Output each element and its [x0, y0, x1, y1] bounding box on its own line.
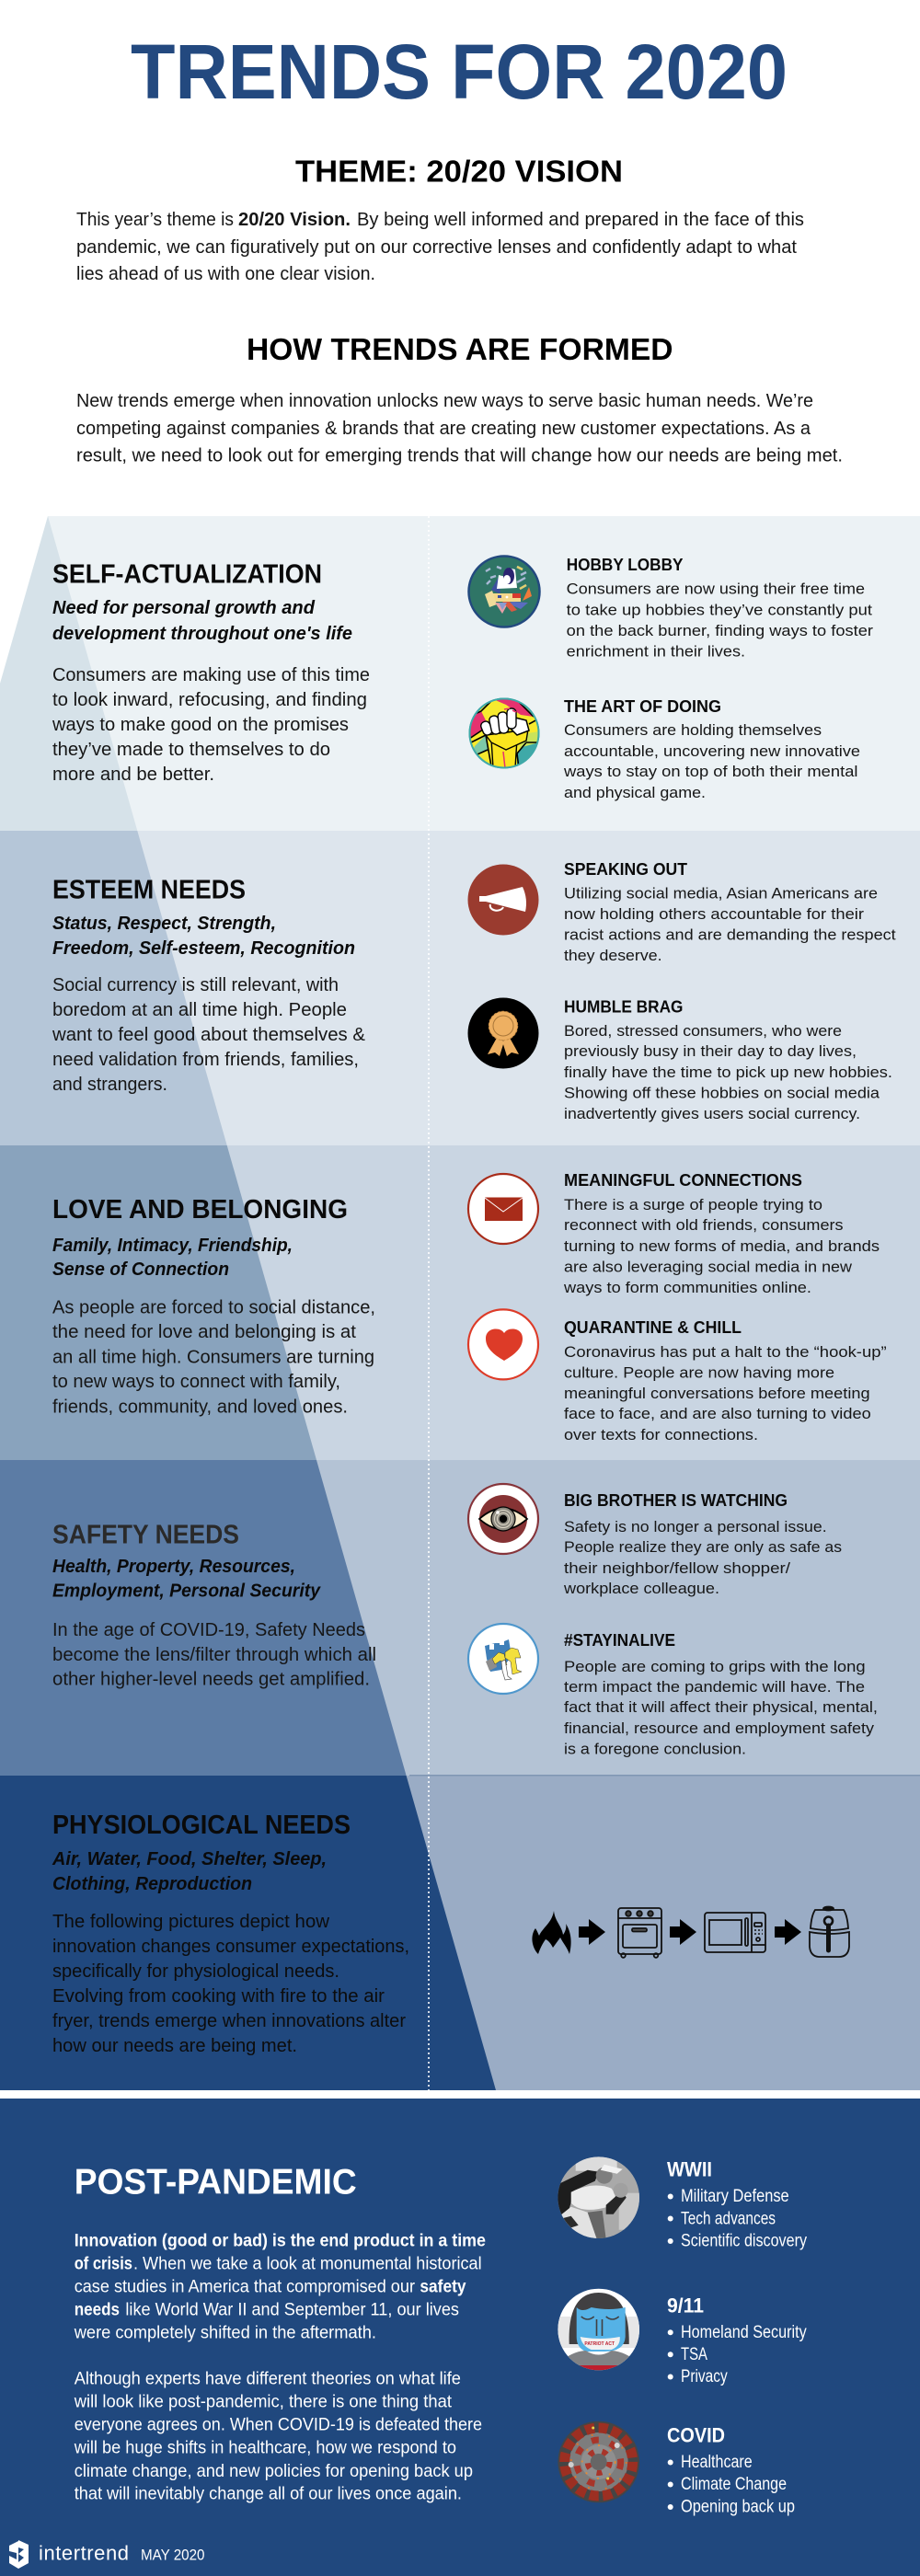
- text block: innovation in crisis: like World War II and September 11, our lives: [125, 2300, 459, 2320]
- item text: term impact the pandemic will have. The: [564, 1678, 865, 1696]
- text block: love and belonging: to new ways to connect with family,: [52, 1372, 340, 1392]
- icon: flame: [532, 1911, 571, 1954]
- text block: life post-pandemic: that will inevitably change all of our lives once again.: [75, 2484, 462, 2504]
- item text: [564, 1022, 892, 1122]
- text block: innovation in crisis: were completely shifted in the aftermath.: [74, 2323, 376, 2343]
- text block: innovation in crisis: . When we take a look at monumental historical: [133, 2254, 482, 2274]
- text block: how trends are formed: competing against companies & brands that are creating new customer expectations. As a: [76, 418, 811, 439]
- item: stayinalive: [468, 1624, 878, 1757]
- subheading: self-actualization: Need for personal growth and: [52, 598, 316, 618]
- text block: innovation in crisis: of crisis: [75, 2254, 132, 2274]
- heading: love and belonging: LOVE AND BELONGING: [52, 1195, 348, 1225]
- item text: ways to form communities online.: [563, 1279, 811, 1296]
- text block: love and belonging: friends, community, and loved ones.: [52, 1397, 348, 1417]
- text block: physiological needs: Evolving from cooking with fire to the air: [52, 1986, 385, 2007]
- heading: physiological needs: PHYSIOLOGICAL NEEDS: [52, 1811, 351, 1840]
- text block: love and belonging: As people are forced to social distance,: [52, 1297, 375, 1317]
- text block: physiological needs: [52, 1912, 409, 2056]
- text block: physiological needs: fryer, trends emerge when innovations alter: [52, 2011, 406, 2031]
- item text: previously busy in their day to day lives,: [564, 1042, 857, 1060]
- bullet list: Climate Change: [681, 2475, 787, 2494]
- text block: life post-pandemic: will look like post-pandemic, there is one thing that: [74, 2392, 453, 2412]
- icon: figures in hazmat suits on plane seats: [468, 1624, 538, 1694]
- divider: dotted vertical line: [428, 516, 430, 2090]
- item text: now holding others accountable for their: [564, 905, 864, 923]
- item text: financial, resource and employment safety: [564, 1719, 875, 1737]
- panel: love and belonging: [0, 1145, 920, 1460]
- item title: THE ART OF DOING: [564, 697, 721, 716]
- illustration: masked face with patriot act: PATRIOT ACT: [584, 2341, 615, 2347]
- icon: microwave: [705, 1913, 765, 1952]
- text block: self-actualization: Consumers are making use of this time: [52, 665, 370, 685]
- arrow 2: [670, 1919, 696, 1945]
- text block: theme description: [76, 209, 804, 284]
- item text: Coronavirus has put a halt to the “hook-up”: [564, 1343, 887, 1361]
- text block: life post-pandemic: will be huge shifts in healthcare, how we respond to: [74, 2438, 456, 2458]
- icon: raised fist: [469, 697, 539, 769]
- item text: meaningful conversations before meeting: [564, 1385, 870, 1402]
- item: hobby lobby: [469, 556, 873, 661]
- text block: innovation in crisis: [74, 2230, 486, 2343]
- subheading: esteem needs: Freedom, Self-esteem, Recognition: [52, 938, 355, 959]
- item text: Consumers are holding themselves: [564, 721, 822, 739]
- item text: Bored, stressed consumers, who were: [564, 1022, 842, 1040]
- item title: #STAYINALIVE: [564, 1631, 675, 1650]
- item text: [563, 1196, 880, 1296]
- case study: wwii: [558, 2156, 807, 2251]
- footer date: MAY 2020: [141, 2547, 204, 2564]
- item text: inadvertently gives users social currency.: [564, 1105, 860, 1122]
- item text: [563, 1518, 842, 1597]
- item text: is a foregone conclusion.: [564, 1741, 746, 1757]
- icon row: fire to oven to microwave to air fryer: [532, 1906, 849, 1958]
- item text: Consumers are now using their free time: [567, 581, 865, 598]
- item title: BIG BROTHER IS WATCHING: [564, 1491, 788, 1510]
- heading: post-pandemic: POST-PANDEMIC: [75, 2163, 357, 2202]
- subheading: safety needs: Employment, Personal Security: [52, 1581, 321, 1601]
- item text: reconnect with old friends, consumers: [564, 1216, 844, 1234]
- text block: esteem needs: Social currency is still relevant, with: [52, 975, 339, 995]
- text block: safety needs: become the lens/filter through which all: [52, 1645, 376, 1665]
- arrow 3: [775, 1919, 801, 1945]
- item text: and physical game.: [564, 784, 706, 801]
- item title: QUARANTINE & CHILL: [564, 1318, 742, 1337]
- logo: intertrend: intertrend: [39, 2542, 129, 2565]
- illustration: coronavirus: [558, 2421, 639, 2502]
- item text: There is a surge of people trying to: [564, 1196, 822, 1213]
- subheading: self-actualization: [52, 598, 352, 644]
- bullet list: Tech advances: [681, 2209, 776, 2228]
- icon: award rosette: [467, 997, 539, 1069]
- item text: over texts for connections.: [564, 1426, 758, 1443]
- text block: how trends are formed: [76, 390, 843, 466]
- text block: esteem needs: need validation from friends, families,: [52, 1050, 359, 1070]
- item text: turning to new forms of media, and brands: [564, 1237, 880, 1255]
- item text: culture. People are now having more: [564, 1364, 834, 1382]
- text block: safety needs: [52, 1620, 376, 1689]
- item text: [564, 885, 896, 964]
- item text: to take up hobbies they’ve constantly put: [567, 602, 872, 618]
- text block: theme description: lies ahead of us with one clear vision.: [76, 263, 375, 284]
- bullet list: [668, 2187, 807, 2251]
- text block: physiological needs: The following pictures depict how: [52, 1912, 330, 1932]
- text block: physiological needs: how our needs are being met.: [52, 2036, 297, 2056]
- item text: fact that it will affect their physical, mental,: [564, 1698, 878, 1716]
- item text: [563, 721, 860, 801]
- icon: eye: [468, 1484, 538, 1554]
- text block: physiological needs: specifically for physiological needs.: [52, 1961, 339, 1982]
- item text: ways to stay on top of both their mental: [563, 763, 857, 780]
- heading: self-actualization: SELF-ACTUALIZATION: [52, 560, 322, 590]
- text block: theme description: pandemic, we can figuratively put on our corrective lenses and confidently adapt to what: [76, 236, 797, 258]
- item: speaking out: [467, 860, 896, 964]
- arrow 1: [579, 1919, 605, 1945]
- text block: innovation in crisis: case studies in America that compromised our: [75, 2276, 415, 2296]
- illustration: masked face with patriot act: [558, 2288, 640, 2371]
- text block: life post-pandemic: climate change, and new policies for opening back up: [75, 2461, 473, 2481]
- text block: theme description: By being well informed and prepared in the face of this: [357, 209, 804, 230]
- item title: MEANINGFUL CONNECTIONS: [564, 1171, 802, 1190]
- item: quarantine and chill: [468, 1309, 887, 1443]
- subheading: physiological needs: Air, Water, Food, Shelter, Sleep,: [52, 1849, 327, 1869]
- subheading: physiological needs: Clothing, Reproduction: [52, 1874, 252, 1894]
- text block: love and belonging: [52, 1297, 375, 1417]
- subheading: physiological needs: [52, 1849, 327, 1894]
- panel: physiological needs: [0, 1775, 920, 2090]
- text block: self-actualization: more and be better.: [52, 765, 214, 785]
- photo: wartime kiss: [558, 2156, 640, 2239]
- icon: megaphone: [467, 865, 539, 935]
- text block: theme description: 20/20 Vision.: [238, 209, 351, 230]
- item text: Safety is no longer a personal issue.: [564, 1518, 827, 1535]
- text block: life post-pandemic: [74, 2369, 482, 2504]
- case study: covid: [558, 2421, 795, 2517]
- heading: how trends are formed: HOW TRENDS ARE FORMED: [247, 332, 673, 366]
- item text: Showing off these hobbies on social media: [564, 1084, 880, 1102]
- item text: face to face, and are also turning to video: [564, 1405, 871, 1422]
- text block: self-actualization: to look inward, refocusing, and finding: [52, 690, 367, 710]
- text block: how trends are formed: New trends emerge when innovation unlocks new ways to serve basic human needs. We’re: [76, 390, 813, 411]
- item text: People realize they are only as safe as: [564, 1538, 842, 1556]
- text block: innovation in crisis: safety: [420, 2276, 466, 2296]
- subheading: safety needs: Health, Property, Resources,: [52, 1557, 295, 1577]
- item text: accountable, uncovering new innovative: [564, 742, 860, 760]
- item text: racist actions and are demanding the respect: [564, 926, 896, 944]
- heading: esteem needs: ESTEEM NEEDS: [52, 876, 246, 905]
- subheading: safety needs: [52, 1557, 321, 1601]
- item text: [567, 581, 873, 661]
- item: the art of doing: [469, 697, 860, 801]
- subheading: love and belonging: Family, Intimacy, Friendship,: [52, 1236, 293, 1256]
- item: humble brag: [467, 997, 892, 1122]
- item title: SPEAKING OUT: [564, 860, 687, 879]
- icon: heart: [468, 1309, 538, 1379]
- bullet list: Homeland Security: [681, 2323, 807, 2342]
- item: meaningful connections: [468, 1171, 880, 1296]
- bullet list: Scientific discovery: [681, 2232, 807, 2251]
- heading: theme: THEME: 20/20 VISION: [295, 155, 623, 188]
- item text: People are coming to grips with the long: [564, 1658, 866, 1675]
- item text: enrichment in their lives.: [567, 643, 745, 661]
- case title: 9/11: [667, 2294, 704, 2317]
- item text: finally have the time to pick up new hobbies.: [564, 1064, 892, 1081]
- title: TRENDS FOR 2020: [131, 29, 788, 115]
- text block: esteem needs: want to feel good about themselves &: [52, 1025, 366, 1045]
- case study: 9/11: [558, 2288, 807, 2386]
- section: theme: [76, 155, 804, 284]
- item title: HUMBLE BRAG: [564, 998, 683, 1017]
- text block: physiological needs: innovation changes consumer expectations,: [52, 1937, 409, 1957]
- bullet list: TSA: [681, 2345, 707, 2364]
- subheading: love and belonging: Sense of Connection: [52, 1259, 229, 1280]
- icon: oven: [618, 1908, 661, 1958]
- bullet list: Privacy: [681, 2367, 728, 2386]
- item: big brother is watching: [468, 1484, 842, 1597]
- text block: safety needs: In the age of COVID-19, Safety Needs: [52, 1620, 365, 1640]
- item text: [564, 1343, 887, 1443]
- panel: post-pandemic: [0, 2099, 920, 2576]
- text block: innovation in crisis: Innovation (good or bad) is the end product in a time: [75, 2230, 486, 2250]
- text block: self-actualization: they’ve made to themselves to do: [52, 740, 330, 760]
- logo: intertrend: [9, 2540, 129, 2569]
- item text: are also leveraging social media in new: [564, 1258, 853, 1275]
- subheading: self-actualization: development throughout one's life: [52, 624, 352, 644]
- item text: workplace colleague.: [563, 1580, 719, 1597]
- icon: envelope: [468, 1174, 538, 1244]
- icon: air fryer: [810, 1906, 849, 1957]
- bullet list: Military Defense: [681, 2187, 789, 2206]
- case title: WWII: [667, 2158, 712, 2181]
- text block: esteem needs: [52, 975, 366, 1095]
- bullet list: Opening back up: [681, 2498, 795, 2517]
- bullet list: [668, 2453, 795, 2517]
- subheading: esteem needs: [52, 914, 355, 959]
- panel: safety needs: [0, 1460, 920, 1776]
- item title: HOBBY LOBBY: [567, 556, 683, 574]
- bullet list: Healthcare: [681, 2453, 753, 2472]
- item text: [564, 1658, 878, 1757]
- text block: love and belonging: the need for love and belonging is at: [52, 1322, 356, 1342]
- text block: esteem needs: and strangers.: [52, 1075, 167, 1095]
- bullet list: [668, 2323, 807, 2386]
- item text: they deserve.: [564, 947, 662, 964]
- text block: life post-pandemic: everyone agrees on. When COVID-19 is defeated there: [75, 2414, 482, 2434]
- text block: safety needs: other higher-level needs get amplified.: [52, 1669, 370, 1689]
- panel: esteem needs: [0, 831, 920, 1145]
- text block: life post-pandemic: Although experts have different theories on what life: [75, 2369, 461, 2389]
- text block: self-actualization: ways to make good on the promises: [52, 715, 349, 735]
- text block: esteem needs: boredom at an all time high. People: [52, 1000, 347, 1020]
- subheading: esteem needs: Status, Respect, Strength,: [52, 914, 276, 934]
- subheading: love and belonging: [52, 1236, 293, 1280]
- item text: Utilizing social media, Asian Americans are: [564, 885, 878, 902]
- text block: innovation in crisis: needs: [75, 2300, 120, 2320]
- text block: theme description: This year’s theme is: [76, 209, 234, 230]
- icon: person at hobby desk: [469, 556, 539, 627]
- section: how trends are formed: [76, 332, 843, 466]
- item text: their neighbor/fellow shopper/: [564, 1559, 790, 1577]
- text block: self-actualization: [52, 665, 370, 785]
- item text: on the back burner, finding ways to foster: [567, 622, 873, 639]
- text block: how trends are formed: result, we need to look out for emerging trends that will change how our needs are being met.: [76, 445, 843, 466]
- case title: COVID: [667, 2423, 725, 2446]
- heading: safety needs: SAFETY NEEDS: [52, 1520, 239, 1549]
- panel: self-actualization: [0, 516, 920, 831]
- text block: love and belonging: an all time high. Consumers are turning: [52, 1347, 374, 1367]
